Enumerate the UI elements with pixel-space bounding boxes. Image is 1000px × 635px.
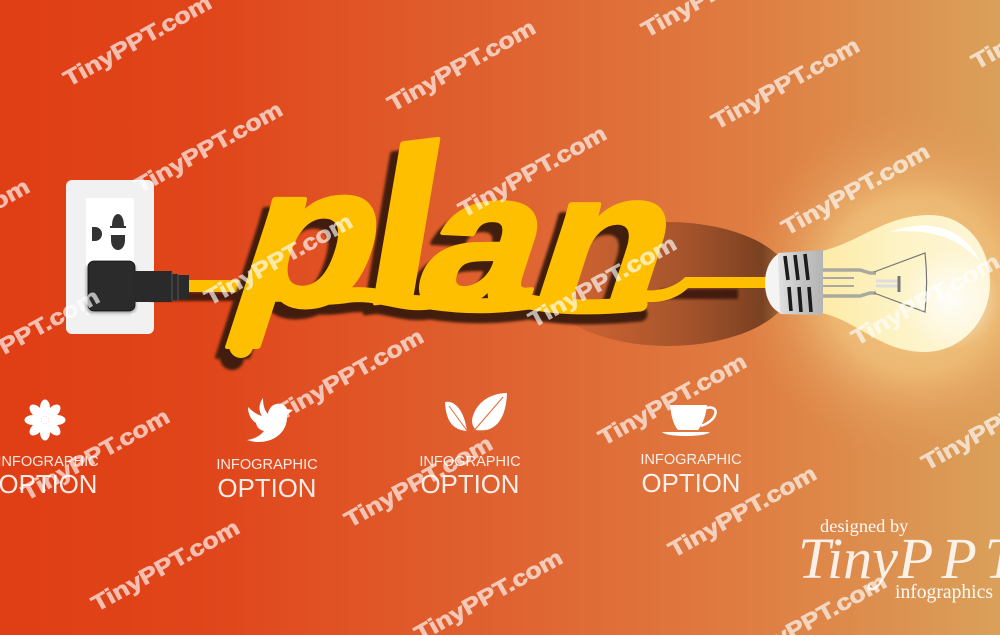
- base body: [778, 250, 823, 315]
- watermarks: TinyPPT.com: [778, 139, 934, 241]
- elliptical shadow behind bulb cord: [544, 222, 792, 346]
- wall socket: [66, 180, 154, 334]
- watermarks: TinyPPT.com: [384, 15, 540, 117]
- plug body: [88, 261, 135, 311]
- bulb highlight: [890, 226, 980, 262]
- black plug: [86, 261, 189, 314]
- base tip: [765, 253, 780, 313]
- watermarks: TinyPPT.com: [201, 209, 357, 311]
- watermarks: TinyPPT.com: [341, 431, 497, 533]
- screw threads: [785, 254, 811, 312]
- credit line 1: designed by: [820, 516, 909, 536]
- plug neck: [134, 271, 189, 302]
- value 1: OPTION: [0, 471, 97, 499]
- plan shadow: plan: [201, 108, 710, 362]
- option 4: [640, 405, 742, 498]
- connecting script strokes: [241, 330, 248, 346]
- watermarks: TinyPPT.com: [525, 231, 681, 333]
- label 1: INFOGRAPHIC: [0, 454, 99, 470]
- yellow cord, left: [186, 280, 252, 292]
- bulb soft spot: [900, 250, 1000, 350]
- icon: flower: [24, 400, 66, 440]
- credit line 2: infographics: [895, 582, 993, 603]
- watermarks: TinyPPT.com: [708, 33, 864, 135]
- label 3: INFOGRAPHIC: [419, 454, 521, 470]
- light bulb: [765, 215, 1000, 352]
- watermarks: TinyPPT.com: [455, 121, 611, 223]
- value 3: OPTION: [421, 471, 519, 499]
- label 2: INFOGRAPHIC: [216, 457, 318, 473]
- yellow cord, right: [628, 277, 770, 302]
- option 3: [419, 393, 521, 499]
- watermarks: TinyPPT.com: [18, 404, 174, 506]
- watermarks: TinyPPT.com: [595, 349, 751, 451]
- bulb screw base: [765, 250, 823, 315]
- plug ridges: [172, 272, 178, 301]
- value 2: OPTION: [218, 475, 316, 503]
- plug shadow: [86, 263, 136, 314]
- socket holes: [92, 214, 126, 250]
- filament stem: [822, 253, 926, 312]
- icon: leaves: [445, 393, 507, 433]
- watermarks: TinyPPT.com: [131, 97, 287, 199]
- cord shadow, right: [660, 289, 738, 299]
- watermarks: TinyPPT.com: [848, 249, 1000, 351]
- credit: designed by TinyPPT infographics: [798, 516, 1000, 603]
- plan word: plan: [211, 98, 720, 352]
- icon: bird: [247, 398, 293, 442]
- watermarks: TinyPPT.com: [88, 515, 244, 617]
- heading: plan: [211, 98, 720, 352]
- icon: coffee cup: [662, 405, 716, 436]
- socket face: [86, 198, 134, 315]
- option 2: [216, 398, 318, 503]
- value 4: OPTION: [642, 470, 740, 498]
- bulb glass: [822, 215, 990, 352]
- option 1: [0, 400, 99, 499]
- watermarks: TinyPPT.com: [665, 461, 821, 563]
- label 4: INFOGRAPHIC: [640, 452, 742, 468]
- cord shadow, left: [150, 292, 242, 301]
- watermarks: TinyPPT.com: [272, 324, 428, 426]
- socket plate: [66, 180, 154, 334]
